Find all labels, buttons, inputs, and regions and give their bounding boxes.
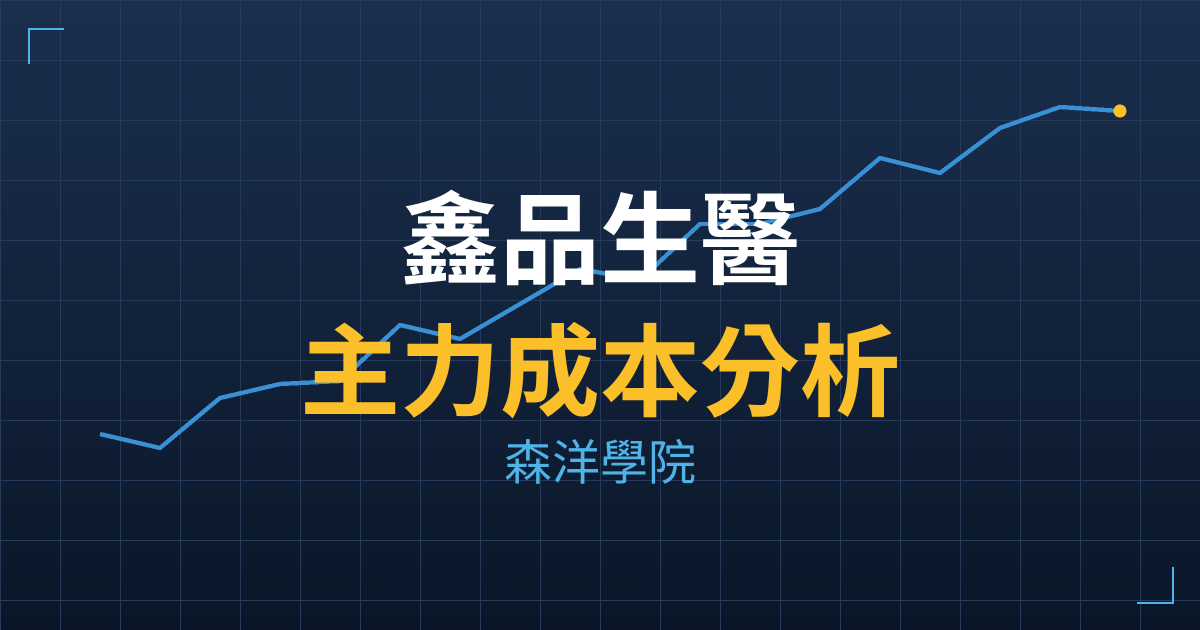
heading: analysis title: 主力成本分析 — [300, 318, 900, 430]
subtitle: academy name: 森洋學院 — [504, 438, 696, 490]
title: company name: 鑫品生醫 — [400, 186, 800, 298]
icon: top-left corner bracket — [29, 29, 64, 64]
icon: bottom-right corner bracket — [1137, 567, 1173, 603]
line chart — [100, 104, 1126, 448]
chart end point — [1114, 104, 1126, 118]
